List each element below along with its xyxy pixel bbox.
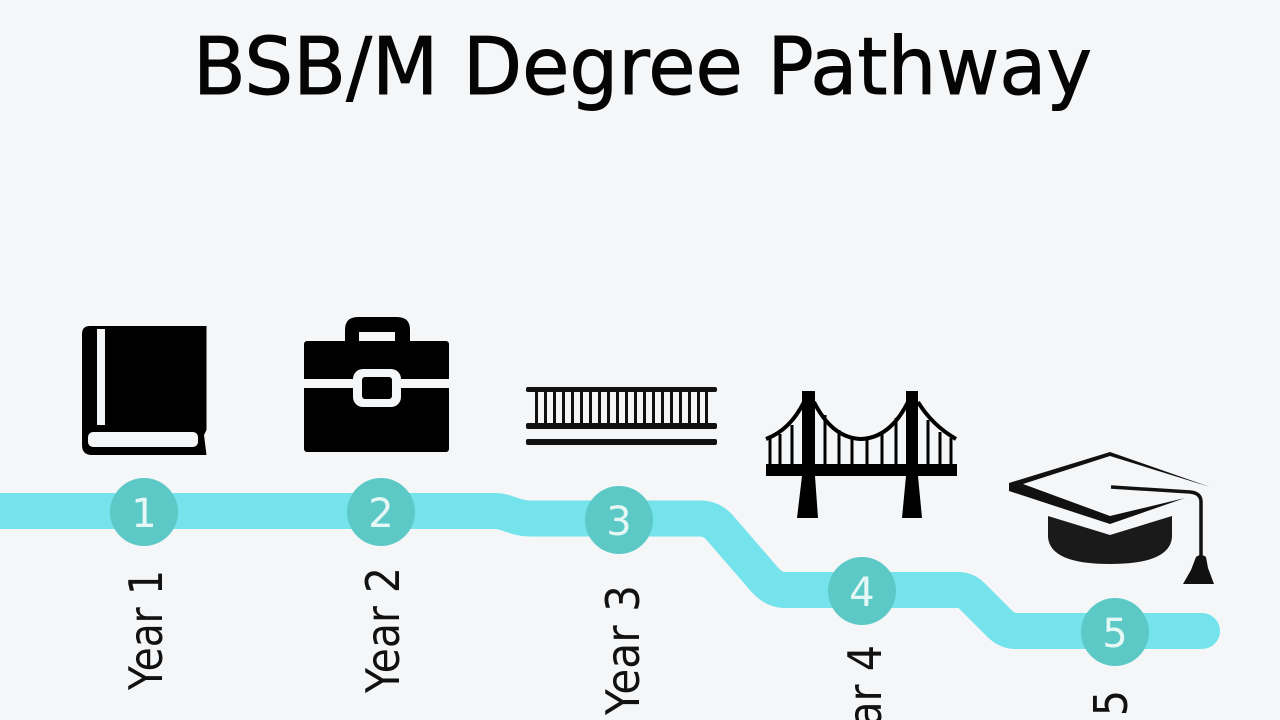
step 4 marker xyxy=(828,557,896,625)
title: BSB/M Degree Pathway xyxy=(193,21,1092,113)
pathway line xyxy=(0,511,1202,631)
icon: graduation cap xyxy=(1009,452,1214,584)
step 5 marker: 5 xyxy=(1102,611,1128,657)
step 2 marker: 2 xyxy=(368,491,394,537)
icon: briefcase xyxy=(304,317,449,452)
icon: book xyxy=(82,326,206,455)
step 3 marker xyxy=(585,486,653,554)
label: Year 2: Year 2 xyxy=(356,567,410,694)
step 1 marker xyxy=(110,478,178,546)
icon: ladder track xyxy=(526,387,717,445)
icon: suspension bridge xyxy=(766,391,957,518)
step 1 marker: 1 xyxy=(131,491,157,537)
label: Year 1: Year 1 xyxy=(119,570,173,691)
step 3 marker: 3 xyxy=(606,499,632,545)
label: Year 3: Year 3 xyxy=(596,585,650,716)
step 5 marker xyxy=(1081,598,1149,666)
step 4 marker: 4 xyxy=(849,570,875,616)
step 2 marker xyxy=(347,478,415,546)
